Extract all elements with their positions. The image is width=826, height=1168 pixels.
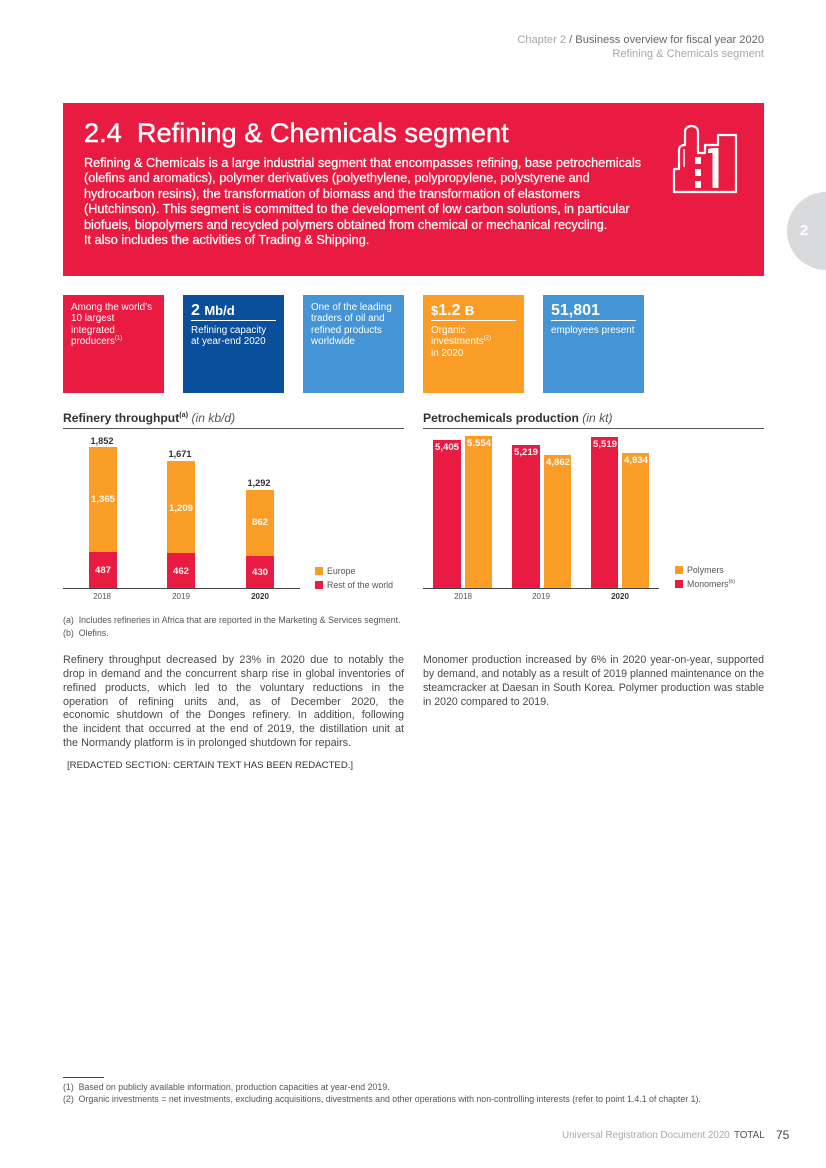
legend: throughput: Rest of the world	[327, 580, 393, 590]
year labels: 2018	[454, 592, 472, 601]
panel: KPI traders: refined products	[311, 325, 382, 336]
page footer: 75	[776, 1128, 789, 1142]
page footnotes: (1) Based on publicly available information, production capacities at year-end 2019.	[63, 1082, 390, 1092]
chapter tab	[787, 192, 826, 270]
intro text: biofuels, biopolymers and recycled polymers obtained from chemical or mechanical recycling.	[84, 218, 607, 232]
text: 2020	[611, 592, 629, 601]
panel: KPI refining capacity: Refining capacity	[191, 325, 266, 336]
text: 2020	[251, 592, 269, 601]
text block: petrochemicals commentary: in 2020 compared to 2019.	[423, 696, 549, 708]
bars 2019	[512, 445, 540, 588]
panel: KPI investments: in 2020	[431, 348, 463, 359]
text block: refinery commentary: drop in demand and the concurrent sharp rise in global inventories of	[63, 668, 404, 680]
intro text: (olefins and aromatics), polymer derivatives (polyethylene, polypropylene, polystyrene and	[84, 171, 590, 185]
legend: throughput	[315, 566, 393, 590]
intro text: (Hutchinson). This segment is committed to the development of low carbon solutions, in particular	[84, 202, 630, 216]
heading: petrochemicals: Petrochemicals production (in kt)	[423, 411, 613, 425]
bars 2019: 462	[173, 566, 189, 577]
chart: petrochemicals: 4,862	[546, 457, 570, 468]
legend: petrochemicals	[675, 565, 735, 589]
panel: KPI employees: employees present	[551, 325, 634, 336]
text: 2019	[172, 592, 190, 601]
text block: refinery commentary: the Normandy platform is in prolonged shutdown for repairs.	[63, 737, 351, 749]
totals: 1,852	[90, 436, 114, 446]
chart: refinery throughput: 1,671	[168, 449, 192, 459]
bars 2018	[433, 440, 461, 588]
intro text	[84, 156, 641, 247]
page header: Chapter 2 / Business overview for fiscal year 2020	[517, 34, 764, 46]
panel: title banner	[63, 103, 764, 276]
panel: KPI traders: worldwide	[311, 336, 355, 347]
intro text: Refining & Chemicals is a large industrial segment that encompasses refining, base petrochemicals	[84, 156, 641, 170]
chart footnotes	[63, 615, 401, 638]
page footer	[562, 1128, 789, 1142]
chart: refinery throughput	[63, 436, 300, 589]
panel: KPI producers: integrated	[71, 325, 115, 336]
legend: throughput: Europe	[327, 566, 355, 576]
chart: petrochemicals: 4,934	[624, 455, 648, 466]
bars 2018	[89, 447, 117, 588]
panel: KPI refining capacity	[183, 295, 284, 393]
heading: refinery throughput: Refinery throughput(a) (in kb/d)	[63, 410, 235, 425]
redaction note: [REDACTED SECTION: CERTAIN TEXT HAS BEEN REDACTED.]	[67, 760, 353, 771]
panel: KPI traders: One of the leading	[311, 302, 392, 313]
panel: KPI investments	[423, 295, 524, 393]
chart: petrochemicals: 5,519	[593, 439, 617, 450]
legend: petrochemicals: Monomers(b)	[687, 579, 735, 589]
bars 2019: 1,209	[169, 503, 193, 514]
panel: KPI investments: $1.2 B	[431, 302, 474, 319]
text block: petrochemicals commentary: Monomer production increased by 6% in 2020 year-on-year, supported	[423, 654, 764, 666]
text block: petrochemicals commentary	[423, 654, 764, 708]
panel: KPI traders	[303, 295, 404, 393]
text block: refinery commentary: Refinery throughput decreased by 23% in 2020 due to notably the	[63, 654, 404, 666]
chart: petrochemicals: 5,554	[467, 438, 491, 449]
panel: KPI refining capacity: 2 Mb/d	[191, 302, 235, 319]
bars 2019	[167, 461, 195, 588]
year labels: 2018	[93, 592, 111, 601]
page footnotes: (2) Organic investments = net investments, excluding acquisitions, divestments and other operations with non-controlling interests (refer to point 1.4.1 of chapter 1).	[63, 1094, 701, 1104]
page header	[517, 34, 764, 60]
panel: KPI traders: traders of oil and	[311, 313, 385, 324]
panel: KPI producers	[63, 295, 164, 393]
panel: KPI employees	[543, 295, 644, 393]
text: 2019	[532, 592, 550, 601]
page footnotes	[63, 1082, 701, 1104]
title: 2.4 Refining & Chemicals segment	[84, 117, 509, 148]
chart footnotes: (b) Olefins.	[63, 628, 109, 638]
intro text: It also includes the activities of Trading & Shipping.	[84, 233, 369, 247]
bars 2018: 487	[95, 565, 111, 576]
chart: petrochemicals: 5,219	[514, 447, 538, 458]
text block: refinery commentary: refined products, which led to the voluntary reductions in the	[63, 682, 404, 694]
text block: refinery commentary	[63, 654, 404, 749]
chart: refinery throughput: 1,292	[248, 478, 270, 488]
value labels: 5,405	[435, 442, 459, 453]
text block: refinery commentary: operation of refining units and, as of December 2020, the	[63, 696, 404, 708]
bars 2020	[591, 437, 618, 588]
bars 2020	[246, 490, 274, 588]
bars 2020: 430	[252, 567, 268, 578]
chapter tab: 2	[800, 222, 808, 239]
panel: KPI employees: 51,801	[551, 302, 600, 319]
page header: Refining & Chemicals segment	[612, 48, 764, 60]
panel: KPI investments: investments(2)	[431, 336, 491, 347]
page footer: Universal Registration Document 2020	[562, 1130, 730, 1141]
text block: refinery commentary: economic shutdown of the Donges refinery. In addition, following	[63, 709, 404, 721]
legend: petrochemicals: Polymers	[687, 565, 724, 575]
panel: KPI producers: producers(1)	[71, 336, 122, 347]
chart: petrochemicals	[423, 436, 659, 589]
intro text: hydrocarbon resins), the transformation of biomass and the transformation of elastomers	[84, 187, 580, 201]
panel: KPI producers: 10 largest	[71, 313, 114, 324]
text block: petrochemicals commentary: steamcracker at Daesan in South Korea. Polymer production was stable	[423, 682, 764, 694]
text block: petrochemicals commentary: by demand, and notably as a result of 2019 planned maintenance on the	[423, 668, 764, 680]
panel: KPI producers: Among the world’s	[71, 302, 152, 313]
text block: refinery commentary: the incident that occurred at the end of 2019, the distillation unit at	[63, 723, 404, 735]
icon: refinery	[672, 124, 738, 194]
panel: KPI investments: Organic	[431, 325, 466, 336]
page footer: TOTAL	[734, 1130, 765, 1141]
bars 2020: 862	[252, 517, 268, 528]
bars 2018: 1,365	[91, 494, 115, 505]
panel: KPI refining capacity: at year-end 2020	[191, 336, 266, 347]
chart footnotes: (a) Includes refineries in Africa that are reported in the Marketing & Services segment.	[63, 615, 401, 625]
